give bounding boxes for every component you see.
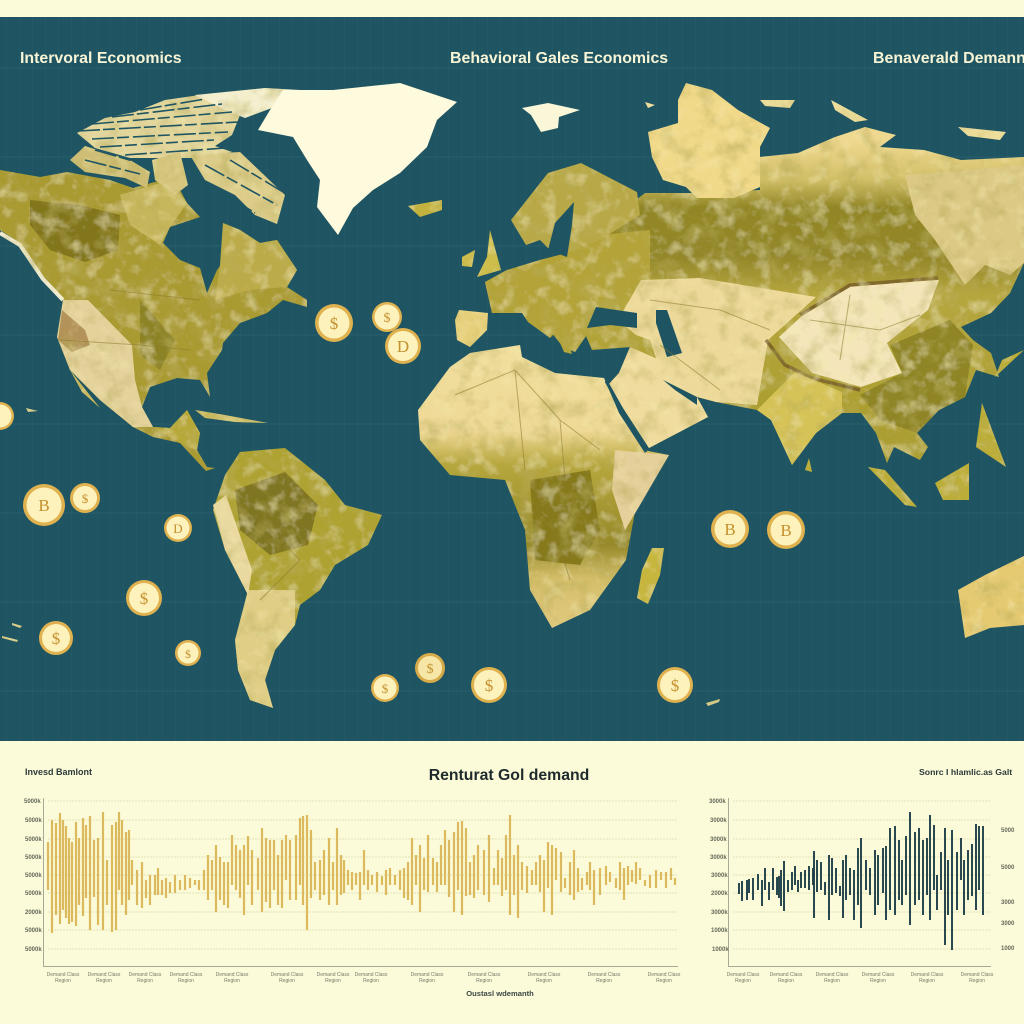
x axis labels: gold chart bbox=[47, 972, 681, 984]
x axis labels: gold chart: Region bbox=[476, 978, 492, 984]
x axis labels: gold chart: Demand Class bbox=[47, 972, 80, 978]
x axis labels: gold chart: Demand Class bbox=[528, 972, 561, 978]
y axis labels: dark chart: 3000k bbox=[710, 855, 727, 861]
coin: $ bbox=[52, 629, 60, 648]
right axis labels: dark chart: 5000 bbox=[1001, 865, 1015, 871]
y axis labels: gold chart: 2000k bbox=[25, 910, 42, 916]
right axis labels: dark chart: 1000 bbox=[1001, 946, 1015, 952]
x axis labels: dark chart bbox=[727, 972, 994, 984]
landmass: eurasia bbox=[485, 127, 1024, 465]
x axis labels: dark chart: Region bbox=[870, 978, 886, 984]
header: right title: Benaverald Demann bbox=[873, 50, 1024, 67]
y axis labels: dark chart: 3000k bbox=[711, 873, 728, 879]
landmass: africa bbox=[418, 345, 669, 628]
x axis labels: dark chart: Region bbox=[919, 978, 935, 984]
coin bbox=[471, 667, 507, 703]
coin bbox=[315, 304, 353, 342]
coin bbox=[711, 510, 749, 548]
landmass: pacific and indian ocean islets bbox=[2, 408, 720, 706]
landmass: southeast asia islands bbox=[805, 350, 1024, 507]
y axis labels: gold chart: 5000k bbox=[25, 928, 42, 934]
landmass: italy and greece peninsulas bbox=[522, 312, 572, 354]
x axis labels: gold chart: Region bbox=[224, 978, 240, 984]
x axis labels: dark chart: Region bbox=[778, 978, 794, 984]
coin bbox=[164, 514, 192, 542]
x axis labels: gold chart: Region bbox=[419, 978, 435, 984]
chart heading: left: Invesd Bamlont bbox=[25, 767, 92, 777]
landmass: madagascar bbox=[637, 548, 664, 604]
x axis labels: dark chart: Demand Class bbox=[961, 972, 994, 978]
coin: B bbox=[780, 521, 792, 540]
y axis labels: dark chart: 1000k bbox=[712, 947, 729, 953]
x axis labels: dark chart: Region bbox=[824, 978, 840, 984]
y axis labels: gold chart: 5000k bbox=[25, 873, 42, 879]
panel: world map ocean background bbox=[0, 17, 1024, 741]
y axis labels: gold chart: 5000k bbox=[25, 837, 42, 843]
y axis labels: dark chart: 3000k bbox=[710, 818, 727, 824]
coin: $ bbox=[330, 314, 338, 333]
landmass: north america bbox=[0, 170, 307, 471]
coin: $ bbox=[185, 647, 191, 661]
coin bbox=[126, 580, 162, 616]
x axis labels: dark chart: Demand Class bbox=[862, 972, 895, 978]
y axis labels: dark chart: 3000k bbox=[710, 837, 727, 843]
header: center title: Behavioral Gales Economics bbox=[450, 50, 668, 67]
y axis labels: dark chart: 3000k bbox=[709, 799, 726, 805]
x axis labels: gold chart: Demand Class bbox=[411, 972, 444, 978]
chart heading: center: Renturat Gol demand bbox=[429, 767, 589, 784]
inland seas bbox=[548, 202, 697, 452]
coin: B bbox=[724, 520, 736, 539]
x axis labels: gold chart: Demand Class bbox=[170, 972, 203, 978]
landmass: greenland bbox=[258, 83, 457, 235]
chart: gold demand waveform bbox=[24, 798, 681, 984]
x axis labels: gold chart: Region bbox=[536, 978, 552, 984]
x axis labels: gold chart: Region bbox=[363, 978, 379, 984]
x axis labels: dark chart: Region bbox=[735, 978, 751, 984]
x axis labels: gold chart: Region bbox=[137, 978, 153, 984]
right axis labels: dark chart: 5000 bbox=[1001, 828, 1015, 834]
coin bbox=[175, 640, 201, 666]
x axis labels: dark chart: Demand Class bbox=[816, 972, 849, 978]
arctic channels bbox=[78, 99, 283, 213]
coin bbox=[371, 674, 399, 702]
coin: D bbox=[173, 521, 183, 536]
landmass: canadian arctic islands bbox=[70, 88, 300, 224]
panel: bottom chart strip bbox=[24, 767, 1015, 998]
landmass: australia bbox=[958, 556, 1024, 638]
coin: $ bbox=[671, 676, 679, 695]
y axis labels: gold chart: 5000k bbox=[25, 855, 42, 861]
landmass: british isles bbox=[462, 230, 501, 277]
y axis labels: gold chart: 5000k bbox=[25, 947, 42, 953]
header: left title: Intervoral Economics bbox=[20, 50, 182, 67]
chart: dark demand waveform bbox=[709, 798, 1015, 984]
coin: $ bbox=[140, 589, 148, 608]
x axis labels: gold chart: Demand Class bbox=[129, 972, 162, 978]
y axis labels: dark chart: 2000k bbox=[711, 891, 728, 897]
x axis labels: gold chart: Demand Class bbox=[468, 972, 501, 978]
right axis labels: dark chart: 3000 bbox=[1001, 900, 1015, 906]
coin bbox=[767, 511, 805, 549]
landmass: scandinavia bbox=[511, 163, 640, 253]
coin bbox=[657, 667, 693, 703]
x axis labels: dark chart: Region bbox=[969, 978, 985, 984]
x axis labels: gold chart: Demand Class bbox=[88, 972, 121, 978]
y axis labels: dark chart: 3000k bbox=[711, 910, 728, 916]
landmass: jan mayen island bbox=[408, 200, 442, 217]
x axis labels: dark chart: Demand Class bbox=[727, 972, 760, 978]
y axis labels: gold chart: 5000k bbox=[24, 799, 41, 805]
landmass: arctic pale island bbox=[648, 83, 770, 198]
right axis labels: dark chart bbox=[1001, 828, 1015, 952]
x axis labels: gold chart: Demand Class bbox=[588, 972, 621, 978]
y axis labels: gold chart bbox=[24, 799, 42, 953]
x axis labels: gold chart: Demand Class bbox=[271, 972, 304, 978]
x axis labels: gold chart: Demand Class bbox=[355, 972, 388, 978]
x axis labels: gold chart: Region bbox=[596, 978, 612, 984]
coin: $ bbox=[485, 676, 493, 695]
coin: B bbox=[38, 496, 50, 515]
x axis labels: gold chart: Region bbox=[656, 978, 672, 984]
x axis labels: dark chart: Demand Class bbox=[911, 972, 944, 978]
y axis labels: dark chart bbox=[709, 799, 729, 953]
landmass: arctic small islands bbox=[645, 100, 1006, 140]
coin bbox=[70, 483, 100, 513]
x axis labels: dark chart: Demand Class bbox=[770, 972, 803, 978]
right axis labels: dark chart: 3000 bbox=[1001, 921, 1015, 927]
x axis labels: gold chart: Region bbox=[325, 978, 341, 984]
x axis labels: gold chart: Demand Class bbox=[216, 972, 249, 978]
chart heading: right: Sonrc I hlamlic.as Galt bbox=[919, 767, 1012, 777]
coin bbox=[415, 653, 445, 683]
coin: $ bbox=[426, 662, 434, 677]
y axis labels: gold chart: 5000k bbox=[25, 891, 42, 897]
landmass: iceland bbox=[522, 103, 580, 132]
coin bbox=[372, 302, 402, 332]
y axis labels: gold chart: 5000k bbox=[25, 818, 42, 824]
coin bbox=[39, 621, 73, 655]
landmass: south america bbox=[213, 448, 382, 708]
axis title: gold chart: Oustasl wdemanth bbox=[466, 989, 534, 998]
x axis labels: gold chart: Region bbox=[279, 978, 295, 984]
x axis labels: gold chart: Region bbox=[178, 978, 194, 984]
coin: $ bbox=[382, 681, 389, 696]
coin bbox=[385, 328, 421, 364]
y axis labels: dark chart: 1000k bbox=[711, 928, 728, 934]
landmass: iberia bbox=[455, 310, 488, 347]
x axis labels: gold chart: Demand Class bbox=[317, 972, 350, 978]
x axis labels: gold chart: Demand Class bbox=[648, 972, 681, 978]
map: world landmasses bbox=[0, 83, 1024, 708]
coin: $ bbox=[384, 311, 390, 326]
landmass: caribbean islands bbox=[70, 370, 268, 423]
coin bbox=[0, 402, 14, 430]
coin markers bbox=[0, 302, 805, 703]
coin bbox=[23, 484, 65, 526]
x axis labels: gold chart: Region bbox=[96, 978, 112, 984]
coin: $ bbox=[82, 491, 89, 506]
x axis labels: gold chart: Region bbox=[55, 978, 71, 984]
coin: D bbox=[397, 337, 409, 356]
map borders bbox=[60, 290, 920, 600]
